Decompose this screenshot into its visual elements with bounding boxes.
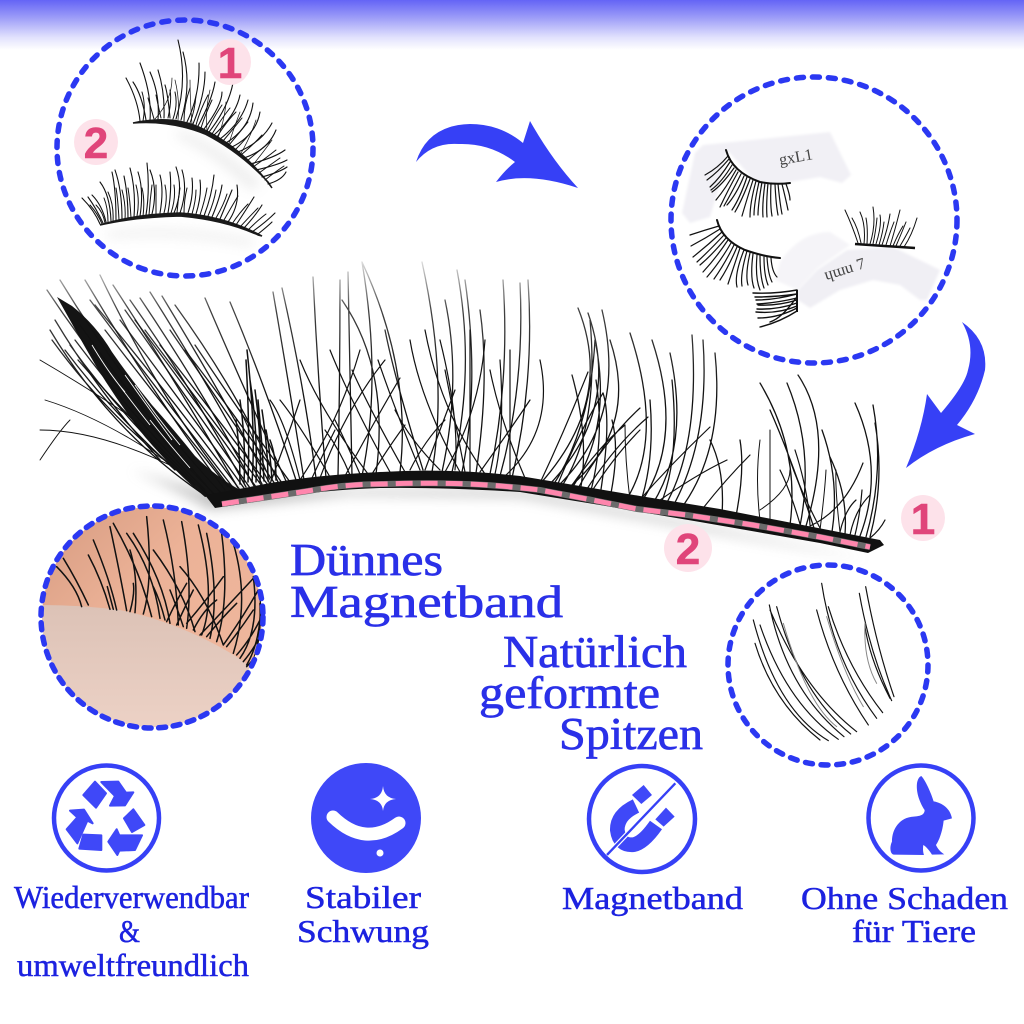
badge: number 2 on band bbox=[664, 524, 712, 574]
dashed circle outline bbox=[671, 77, 957, 363]
badge: number 1 on top circle: 1 bbox=[218, 39, 242, 88]
badge: number 1 on lash tip: 1 bbox=[911, 495, 935, 544]
lash upper on card bbox=[705, 150, 790, 217]
label: no harm to animals: für Tiere bbox=[852, 914, 976, 949]
white card upper bbox=[682, 132, 851, 223]
panel: two lash styles circle bbox=[57, 20, 313, 276]
crossing right hairs bbox=[540, 372, 885, 538]
lash bottom small bbox=[753, 290, 797, 327]
badge: number 1 on lash tip bbox=[901, 495, 945, 544]
white card middle bbox=[775, 232, 850, 290]
badge: number 2 on band: 2 bbox=[676, 525, 700, 574]
card label upper: gxL1 bbox=[778, 146, 814, 169]
icon: crossed magnet bbox=[589, 766, 695, 872]
card label lower: ɥɯu 7 bbox=[822, 255, 867, 284]
dense left fan bbox=[57, 297, 240, 497]
panel: lashes on card circle bbox=[671, 77, 957, 363]
arrow: curved to packaging circle bbox=[416, 121, 578, 188]
label: reusable and eco friendly: & bbox=[119, 914, 140, 949]
label: reusable and eco friendly bbox=[14, 880, 249, 983]
right half hairs bbox=[540, 308, 879, 537]
label: no harm to animals bbox=[801, 881, 1008, 949]
lash tips bbox=[753, 583, 894, 741]
heading: naturally shaped tips: Natürlich bbox=[503, 627, 687, 677]
badge: number 1 on top circle bbox=[209, 39, 251, 88]
label: no harm to animals: Ohne Schaden bbox=[801, 881, 1008, 916]
icon: recycling bbox=[54, 766, 159, 870]
icon: stable curl bbox=[311, 763, 421, 873]
soft shadows beneath lashes bbox=[105, 130, 262, 246]
label: stable curl: Schwung bbox=[297, 914, 429, 949]
heading: thin magnet band bbox=[290, 535, 563, 627]
label: reusable and eco friendly: umweltfreundlich bbox=[17, 948, 249, 983]
heading: naturally shaped tips: geformte bbox=[479, 668, 660, 718]
lower lash strip bbox=[82, 163, 275, 236]
badge: number 2 on top circle bbox=[74, 119, 118, 168]
fan second layer bbox=[55, 300, 290, 492]
panel: natural tips circle bbox=[728, 565, 928, 765]
lash middle on card bbox=[690, 220, 780, 290]
mid crossing hairs bbox=[270, 330, 543, 484]
band shadow bbox=[130, 470, 870, 560]
main lash bbox=[40, 262, 885, 560]
dashed circle outline bbox=[41, 506, 263, 728]
faint tip hairs bbox=[240, 410, 840, 532]
icon: rabbit bbox=[868, 766, 974, 870]
panel: worn lash eye circle bbox=[40, 505, 265, 732]
arrow: curved to main lash bbox=[906, 322, 985, 468]
heading: naturally shaped tips bbox=[479, 627, 703, 759]
label: stable curl: Stabiler bbox=[305, 880, 422, 915]
upper lash strip bbox=[126, 40, 287, 188]
badge: number 2 on top circle: 2 bbox=[84, 119, 108, 168]
white slits in fan bbox=[92, 345, 190, 468]
skin photo bbox=[40, 505, 265, 732]
label: magnet band: Magnetband bbox=[562, 881, 743, 916]
dashed circle outline bbox=[57, 20, 313, 276]
lash top right bbox=[845, 207, 917, 248]
heading: thin magnet band: Magnetband bbox=[290, 577, 563, 627]
heading: thin magnet band: Dünnes bbox=[290, 535, 443, 585]
white card lower bbox=[798, 247, 940, 308]
black lash band bbox=[205, 471, 884, 553]
label: reusable and eco friendly: Wiederverwendbar bbox=[14, 880, 249, 915]
magnet strip grey bbox=[222, 483, 870, 547]
top gradient banner bbox=[0, 0, 1024, 50]
outer lash hairs bbox=[47, 262, 530, 497]
vertical cluster near band bbox=[236, 350, 276, 484]
faint hairs bbox=[40, 360, 190, 478]
heading: naturally shaped tips: Spitzen bbox=[559, 709, 703, 759]
dashed circle outline bbox=[728, 565, 928, 765]
magnet strip pink dashes bbox=[222, 483, 870, 547]
label: stable curl bbox=[297, 880, 429, 949]
